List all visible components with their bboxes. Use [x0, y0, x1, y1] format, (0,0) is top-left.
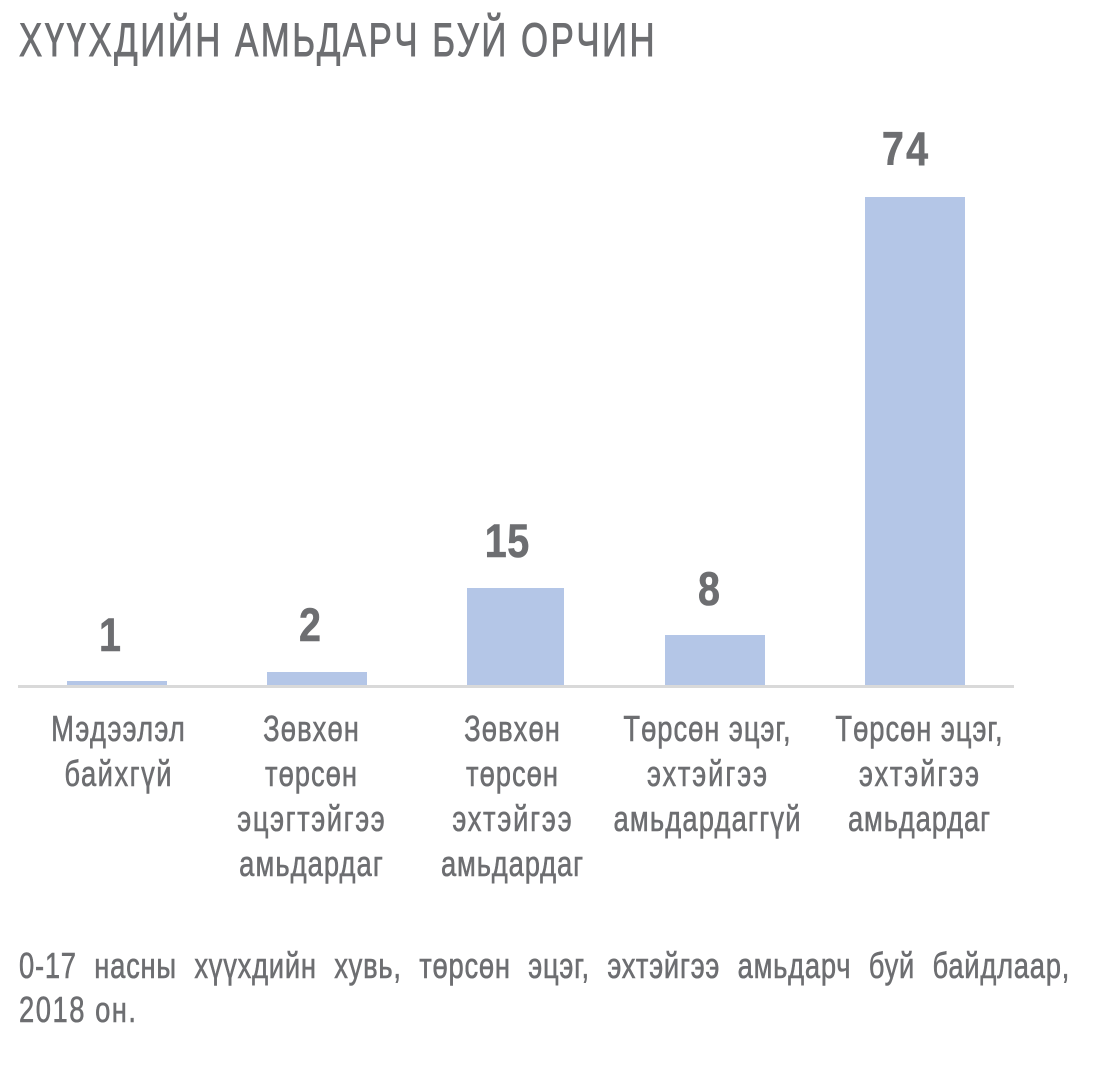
bar: Төрсөн эцэг, эхтэйгээ амьдардаг — [865, 197, 965, 685]
value: 8: 8 — [698, 564, 720, 616]
category label 1 — [51, 708, 185, 794]
category label 3: амьдардаг — [441, 843, 583, 884]
category label 3: Зөвхөн — [464, 708, 560, 749]
category label 3 — [441, 708, 583, 884]
bar chart — [18, 124, 1014, 884]
caption: 0-17 насны хүүхдийн хувь, төрсөн эцэг, эхтэйгээ амьдарч буй байдлаар, — [19, 945, 1069, 986]
value: 1: 1 — [99, 610, 121, 662]
category label 5 — [835, 708, 1003, 839]
category label 5: эхтэйгээ — [859, 753, 979, 794]
category label 3: эхтэйгээ — [452, 798, 572, 839]
category label 3: төрсөн — [466, 753, 558, 794]
value: 74: 74 — [882, 124, 928, 176]
category label 1: байхгүй — [64, 753, 172, 794]
caption — [19, 945, 1069, 1030]
category label 4: эхтэйгээ — [647, 753, 767, 794]
category label 4 — [614, 708, 800, 839]
value: 15: 15 — [485, 516, 529, 568]
bar: Мэдээлэл байхгүй — [67, 681, 167, 685]
category label 2 — [237, 708, 385, 884]
title: ХҮҮХДИЙН АМЬДАРЧ БУЙ ОРЧИН — [19, 14, 655, 66]
category label 4: амьдардаггүй — [614, 798, 800, 839]
category label 5: Төрсөн эцэг, — [835, 708, 1003, 749]
bar: Төрсөн эцэг, эхтэйгээ амьдардаггүй — [665, 635, 765, 685]
axis line — [18, 685, 1014, 688]
value: 2: 2 — [299, 600, 321, 652]
bar: Зөвхөн төрсөн эхтэйгээ амьдардаг — [467, 588, 564, 685]
category label 2: төрсөн — [265, 753, 357, 794]
category label 5: амьдардаг — [848, 798, 990, 839]
category label 2: амьдардаг — [239, 843, 383, 884]
category label 2: эцэгтэйгээ — [237, 798, 385, 839]
caption: 2018 он. — [19, 989, 136, 1030]
category label 4: Төрсөн эцэг, — [623, 708, 791, 749]
category label 2: Зөвхөн — [263, 708, 359, 749]
category label 1: Мэдээлэл — [51, 708, 185, 749]
bar: Зөвхөн төрсөн эцэгтэйгээ амьдардаг — [267, 672, 367, 685]
